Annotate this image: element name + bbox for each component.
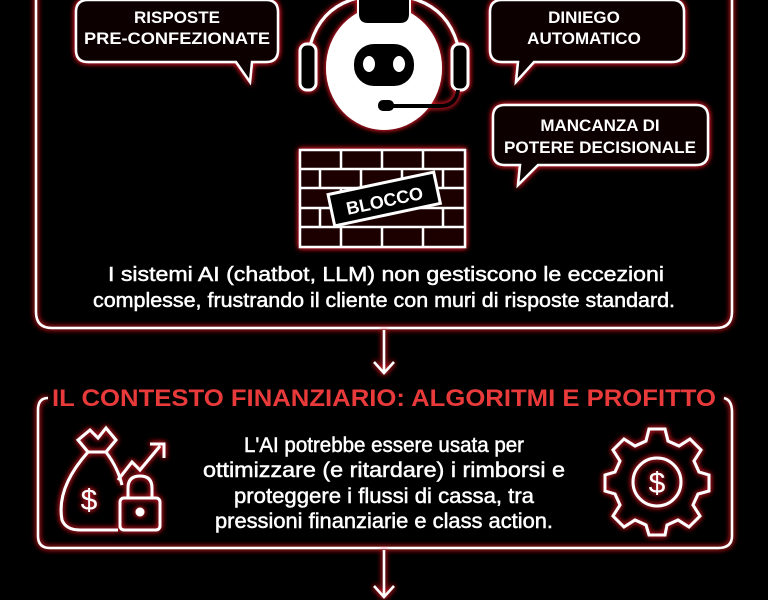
icon: brick wall with BLOCCO sign: BLOCCO	[344, 183, 425, 219]
heading: financial context: IL CONTESTO FINANZIARIO: ALGORITMI E PROFITTO	[52, 385, 716, 412]
bubble: diniego automatico	[490, 0, 684, 82]
icon: money bag with arrow and lock: $	[81, 484, 98, 517]
panel: financial context	[38, 398, 732, 548]
bubble: diniego automatico: DINIEGO	[548, 8, 620, 27]
icon: brick wall with BLOCCO sign	[300, 150, 465, 247]
icon: robot with headset	[300, 0, 468, 130]
bubble: mancanza di potere decisionale	[493, 105, 708, 185]
panel: AI chatbot wall	[36, 0, 732, 328]
text: AI systems description	[93, 264, 675, 312]
text: financial description: pressioni finanziarie e class action.	[215, 510, 553, 533]
icon: gear with dollar	[605, 429, 709, 535]
text: financial description: ottimizzare (e ritardare) i rimborsi e	[203, 459, 565, 482]
bubble: mancanza di potere decisionale: POTERE DECISIONALE	[504, 138, 696, 157]
bubble: risposte pre-confezionate: PRE-CONFEZIONATE	[84, 29, 270, 48]
text: financial description: L'AI potrebbe essere usata per	[244, 434, 524, 457]
bubble: risposte pre-confezionate: RISPOSTE	[134, 8, 220, 27]
bubble: diniego automatico: AUTOMATICO	[527, 29, 641, 48]
arrow: down to financial context	[374, 330, 394, 373]
text: financial description	[203, 434, 565, 533]
icon: money bag with arrow and lock	[61, 428, 164, 530]
bubble: risposte pre-confezionate	[76, 0, 278, 82]
arrow: down to next section	[374, 550, 394, 597]
text: AI systems description: I sistemi AI (chatbot, LLM) non gestiscono le eccezioni	[108, 264, 664, 286]
text: AI systems description: complesse, frustrando il cliente con muri di risposte standard.	[93, 290, 675, 312]
bubble: mancanza di potere decisionale: MANCANZA DI	[540, 116, 660, 135]
icon: gear with dollar: $	[649, 467, 666, 500]
text: financial description: proteggere i flussi di cassa, tra	[234, 485, 534, 508]
